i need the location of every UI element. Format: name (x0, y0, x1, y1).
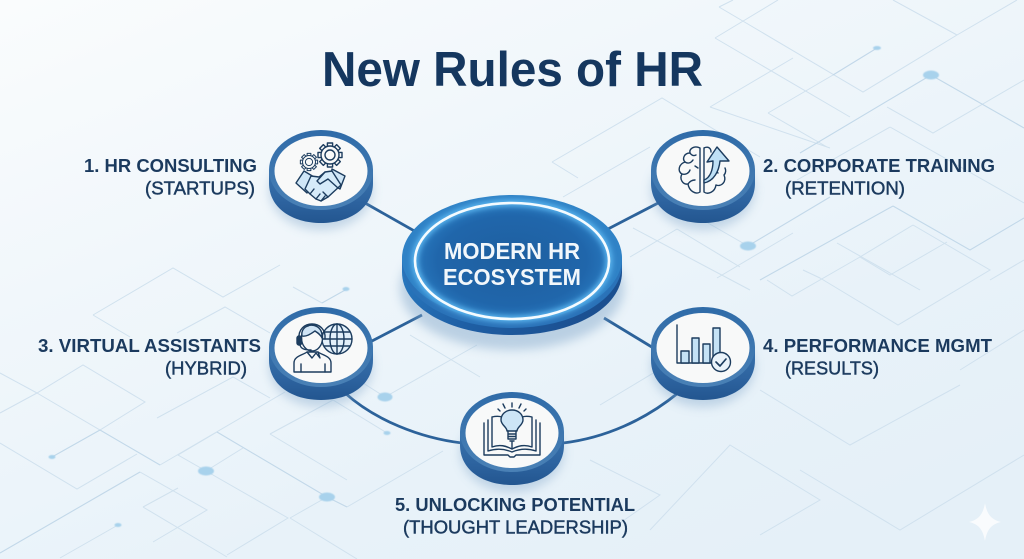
label 1: (STARTUPS) (145, 178, 255, 198)
connector lines (345, 201, 678, 443)
icon: bar chart with check (677, 325, 730, 372)
label 2: (RETENTION) (785, 178, 905, 198)
node 2: Corporate training (651, 130, 755, 230)
icon: open book with light bulb (484, 403, 540, 457)
node 4: Performance management (651, 307, 755, 407)
label 1: 1. HR CONSULTING (84, 155, 257, 176)
label 5: 5. UNLOCKING POTENTIAL (395, 494, 635, 515)
central hub: Modern HR Ecosystem (400, 195, 624, 350)
label 3: (HYBRID) (165, 358, 247, 378)
label 4 (763, 335, 993, 378)
sparkle mark (969, 503, 1001, 541)
label 5 (395, 494, 635, 538)
icon: brain with arrow (679, 147, 729, 193)
label 4: 4. PERFORMANCE MGMT (763, 335, 993, 356)
hub label: ECOSYSTEM (443, 264, 581, 290)
title: New Rules of HR (322, 43, 703, 97)
hub label: MODERN HR (444, 238, 580, 264)
label 5: (THOUGHT LEADERSHIP) (403, 516, 628, 538)
icon: headset agent and globe (294, 324, 352, 372)
icon: gears and handshake (296, 143, 345, 201)
label 2: 2. CORPORATE TRAINING (763, 155, 995, 176)
label 3: 3. VIRTUAL ASSISTANTS (38, 335, 261, 356)
label 2 (763, 155, 995, 198)
node 1: HR consulting (269, 130, 373, 230)
node 3: Virtual assistants (269, 307, 373, 407)
label 1 (84, 155, 257, 198)
label 3 (38, 335, 261, 378)
node 5: Unlocking potential (460, 392, 564, 492)
hub label (443, 238, 581, 290)
background nodes (48, 46, 939, 527)
label 4: (RESULTS) (785, 358, 879, 378)
